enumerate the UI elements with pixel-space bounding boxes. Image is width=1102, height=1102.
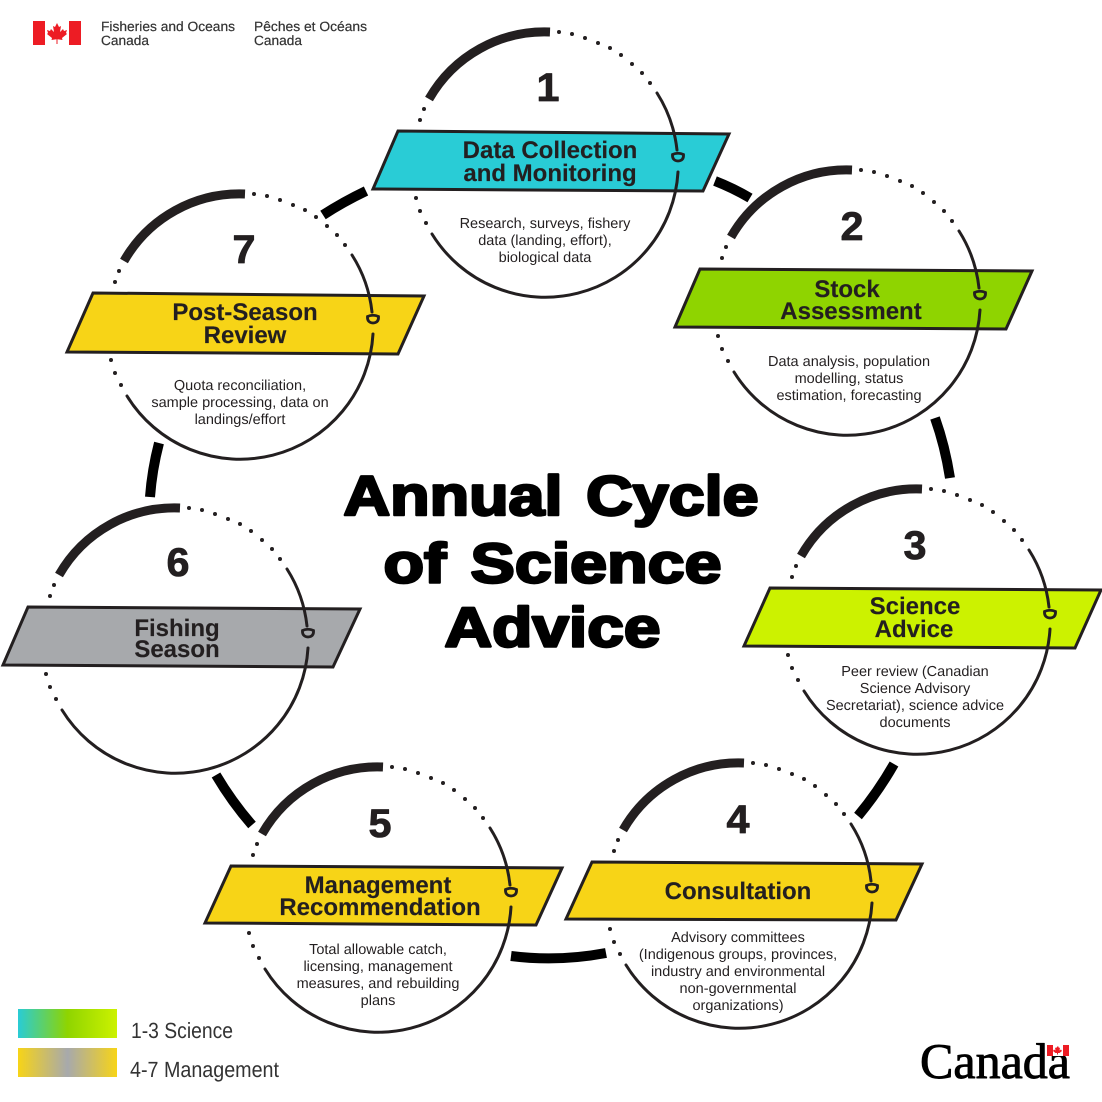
text: stock assessment description: Data analysis, population <box>768 354 930 370</box>
title: of Science <box>384 532 722 594</box>
ring: step 7 <box>109 192 379 459</box>
banner: consultation <box>566 862 922 920</box>
text: data collection description: biological data <box>499 250 592 266</box>
ring: step 3 <box>786 487 1056 754</box>
number 4: 4 <box>726 798 750 842</box>
icon: small flag <box>1047 1045 1069 1056</box>
text: French department name: Canada <box>254 33 302 48</box>
heading: stock assessment: Assessment <box>780 298 922 325</box>
legend swatch: science <box>18 1009 117 1038</box>
legend swatch: management <box>18 1048 117 1077</box>
panel: step 7 post-season review <box>67 192 424 459</box>
number 6: 6 <box>166 541 190 585</box>
text: management recommendation description: measures, and rebuilding <box>297 976 459 992</box>
arrow: connector 1 to 2 <box>715 181 750 198</box>
legend label: science: 1-3 Science <box>131 1018 233 1043</box>
ring: step 2 <box>716 168 986 435</box>
ring: step 4 <box>608 761 878 1028</box>
heading: stock assessment: Stock <box>814 276 880 303</box>
arrow: connector 5 to 6 <box>216 775 252 825</box>
text: science advice description: Peer review (Canadian <box>841 664 989 680</box>
arrow: connector 7 to 1 <box>323 191 366 215</box>
text: science advice description: documents <box>880 715 950 731</box>
banner: stock assessment <box>675 269 1032 329</box>
text: data collection description: Research, surveys, fishery <box>460 216 631 232</box>
text: English department name: Fisheries and Oceans <box>101 19 235 34</box>
icon: Canadian flag <box>33 21 81 45</box>
text: consultation description: industry and environmental <box>651 964 825 980</box>
ring: step 6 <box>44 506 314 773</box>
text: consultation description: organizations) <box>692 998 784 1014</box>
header: Fisheries and Oceans Canada signature <box>33 19 367 48</box>
panel: step 3 science advice <box>744 487 1101 754</box>
heading: post-season review: Review <box>204 322 287 349</box>
number 2: 2 <box>840 205 864 249</box>
panel: step 1 data collection <box>373 30 729 297</box>
text: French department name: Pêches et Océans <box>254 19 367 34</box>
text: post-season review description: landings/effort <box>195 412 285 428</box>
text: stock assessment description: estimation, forecasting <box>776 388 922 404</box>
heading: post-season review: Post-Season <box>172 299 318 326</box>
heading: science advice: Science <box>870 593 960 620</box>
banner: science advice <box>744 588 1101 648</box>
arrow: connector 2 to 3 <box>935 418 950 478</box>
number 5: 5 <box>368 802 392 846</box>
banner: fishing season <box>3 607 360 667</box>
title: Advice <box>444 596 660 658</box>
title: Annual Cycle <box>344 464 758 527</box>
heading: data collection and monitoring: Data Collection <box>463 137 637 164</box>
heading: science advice: Advice <box>875 616 953 643</box>
heading: consultation: Consultation <box>665 878 811 905</box>
text: consultation description: Advisory committees <box>671 930 805 946</box>
text: consultation description: non-governmental <box>680 981 796 997</box>
panel: step 6 fishing season <box>3 506 360 773</box>
ring: step 1 <box>414 30 684 297</box>
number 1: 1 <box>536 66 560 110</box>
panel: step 2 stock assessment <box>675 168 1032 435</box>
text: consultation description: (Indigenous groups, provinces, <box>639 947 837 963</box>
Canada wordmark <box>920 1033 1070 1089</box>
text: data collection description: data (landing, effort), <box>478 233 612 249</box>
legend <box>18 1009 279 1082</box>
text: science advice description: Science Advisory <box>860 681 971 697</box>
heading: data collection and monitoring: and Monitoring <box>463 160 637 187</box>
text: post-season review description: Quota reconciliation, <box>174 378 306 394</box>
legend label: management: 4-7 Management <box>130 1057 279 1082</box>
text: management recommendation description: licensing, management <box>303 959 453 975</box>
arrow: connector 6 to 7 <box>150 443 159 497</box>
banner: data collection <box>373 131 729 191</box>
text: management recommendation description: plans <box>361 993 395 1009</box>
text: stock assessment description: modelling, status <box>795 371 903 387</box>
heading: fishing season: Season <box>134 636 220 663</box>
wordmark text: Canada <box>920 1033 1070 1089</box>
panel: step 4 consultation <box>566 761 922 1028</box>
text: management recommendation description: Total allowable catch, <box>309 942 447 958</box>
heading: fishing season: Fishing <box>134 615 220 642</box>
arrow: connector 4 to 5 <box>511 953 606 958</box>
text: science advice description: Secretariat), science advice <box>826 698 1004 714</box>
arrow: connector 3 to 4 <box>858 764 894 816</box>
text: post-season review description: sample processing, data on <box>151 395 329 411</box>
banner: post-season review <box>67 293 424 354</box>
number 3: 3 <box>904 524 926 568</box>
ring: step 5 <box>247 765 517 1032</box>
text: English department name: Canada <box>101 33 149 48</box>
banner: management recommendation <box>205 866 562 925</box>
heading: management recommendation: Recommendation <box>279 894 481 921</box>
panel: step 5 management recommendation <box>205 765 562 1032</box>
heading: management recommendation: Management <box>305 872 451 899</box>
number 7: 7 <box>232 228 256 272</box>
